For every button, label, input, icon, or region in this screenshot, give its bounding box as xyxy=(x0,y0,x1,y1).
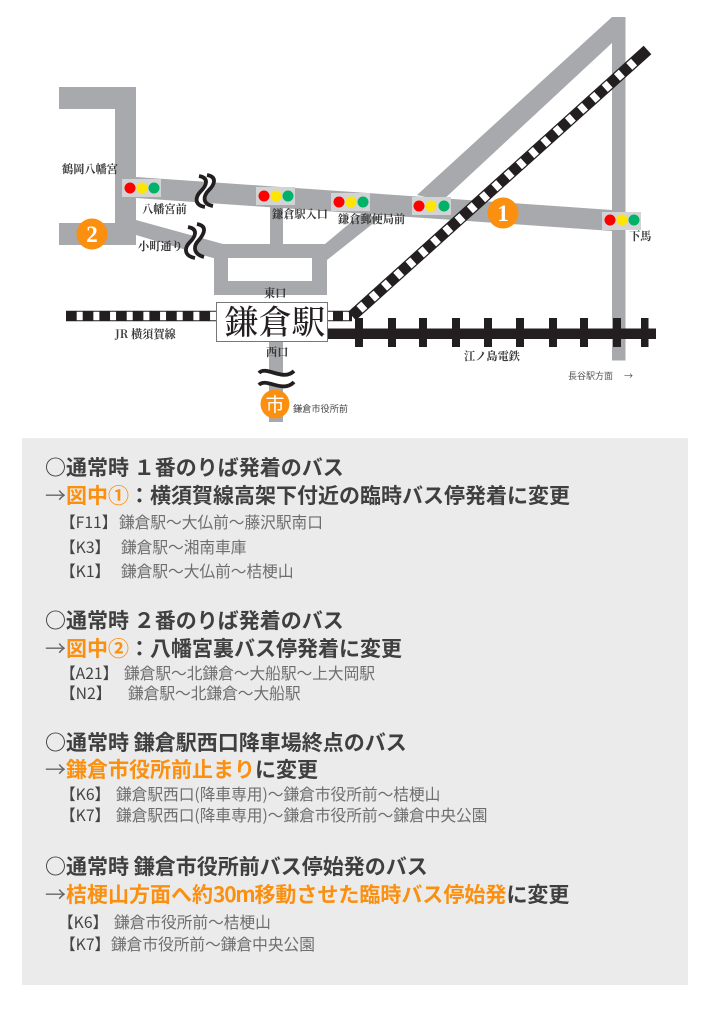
route F11 text: 鎌倉駅～大仏前～藤沢駅南口 xyxy=(119,510,323,533)
route F11: 【F11】 xyxy=(60,510,117,533)
map label: 下馬: 下馬 xyxy=(629,228,651,244)
traffic light: 八幡宮前 xyxy=(122,179,161,197)
map label: 鎌倉郵便局前: 鎌倉郵便局前 xyxy=(338,211,405,227)
marker 1 xyxy=(488,198,518,228)
map label: 鎌倉市役所前: 鎌倉市役所前 xyxy=(293,401,348,415)
marker 市: 市 xyxy=(265,390,285,417)
map label: 鎌倉駅入口: 鎌倉駅入口 xyxy=(272,206,328,222)
change: city hall departure: →桔梗山方面へ約30m移動させた臨時バス停始発に変更 xyxy=(45,879,569,909)
change: stop 1: →図中①：横須賀線高架下付近の臨時バス停発着に変更 xyxy=(45,480,570,510)
heading: stop 2: ○通常時 ２番のりば発着のバス xyxy=(45,605,344,635)
map label: 小町通り: 小町通り xyxy=(138,238,183,254)
route N2: 【N2】 xyxy=(60,681,111,704)
heading: west exit terminus: ○通常時 鎌倉駅西口降車場終点のバス xyxy=(45,727,407,757)
road break mark: 八幡宮前 xyxy=(197,175,214,207)
road break mark: 小町通り xyxy=(186,224,204,258)
route A21: 【A21】 xyxy=(60,661,118,684)
traffic light: 鎌倉駅入口 xyxy=(256,187,295,205)
map label: 鶴岡八幡宮: 鶴岡八幡宮 xyxy=(62,161,118,177)
station name box: 鎌倉駅 xyxy=(225,295,325,344)
heading: city hall departure: ○通常時 鎌倉市役所前バス停始発のバス xyxy=(45,851,428,881)
map label: 八幡宮前: 八幡宮前 xyxy=(142,201,187,217)
map label: 西口: 西口 xyxy=(266,344,288,360)
change: stop 2: →図中②：八幡宮裏バス停発着に変更 xyxy=(45,633,402,663)
route K7 city hall text: 鎌倉市役所前～鎌倉中央公園 xyxy=(111,932,315,955)
map label: 長谷駅方面: 長谷駅方面 → xyxy=(568,369,633,382)
marker 1: 1 xyxy=(497,201,509,226)
route K6: 【K6】 xyxy=(60,782,110,805)
traffic light: 下馬 xyxy=(602,212,641,230)
route K6 city hall: 【K6】 xyxy=(58,910,108,933)
marker 2 xyxy=(76,218,108,250)
map label: 江ノ島電鉄: 江ノ島電鉄 xyxy=(464,348,521,364)
marker 市 xyxy=(260,390,290,418)
route K6 city hall text: 鎌倉市役所前～桔梗山 xyxy=(114,910,271,933)
traffic light: junction xyxy=(412,197,451,215)
route K7 text: 鎌倉駅西口(降車専用)～鎌倉市役所前～鎌倉中央公園 xyxy=(116,803,487,826)
road break mark: 西口 xyxy=(259,371,294,386)
route K3 text: 鎌倉駅～湘南車庫 xyxy=(121,535,246,558)
route K7 city hall: 【K7】 xyxy=(60,932,110,955)
route K3: 【K3】 xyxy=(60,535,110,558)
route N2 text: 鎌倉駅～北鎌倉～大船駅 xyxy=(128,681,301,704)
route K7: 【K7】 xyxy=(60,803,110,826)
heading: stop 1: ○通常時 １番のりば発着のバス xyxy=(45,452,344,482)
route K1: 【K1】 xyxy=(60,559,110,582)
road network xyxy=(59,17,626,422)
route K6 text: 鎌倉駅西口(降車専用)～鎌倉市役所前～桔梗山 xyxy=(116,782,440,805)
route A21 text: 鎌倉駅～北鎌倉～大船駅～上大岡駅 xyxy=(124,661,375,684)
panel: bus stop changes xyxy=(22,438,688,985)
JR Yokosuka line xyxy=(66,50,648,316)
marker 2: 2 xyxy=(86,222,98,247)
route map xyxy=(59,17,656,422)
map label: 東口: 東口 xyxy=(264,285,286,301)
map label: JR横須賀線: JR 横須賀線 xyxy=(114,326,177,342)
Enoshima Electric Railway xyxy=(328,318,656,347)
route K1 text: 鎌倉駅～大仏前～桔梗山 xyxy=(121,559,294,582)
traffic light: 鎌倉郵便局前 xyxy=(331,193,370,211)
change: west exit terminus: →鎌倉市役所前止まりに変更 xyxy=(45,754,318,784)
